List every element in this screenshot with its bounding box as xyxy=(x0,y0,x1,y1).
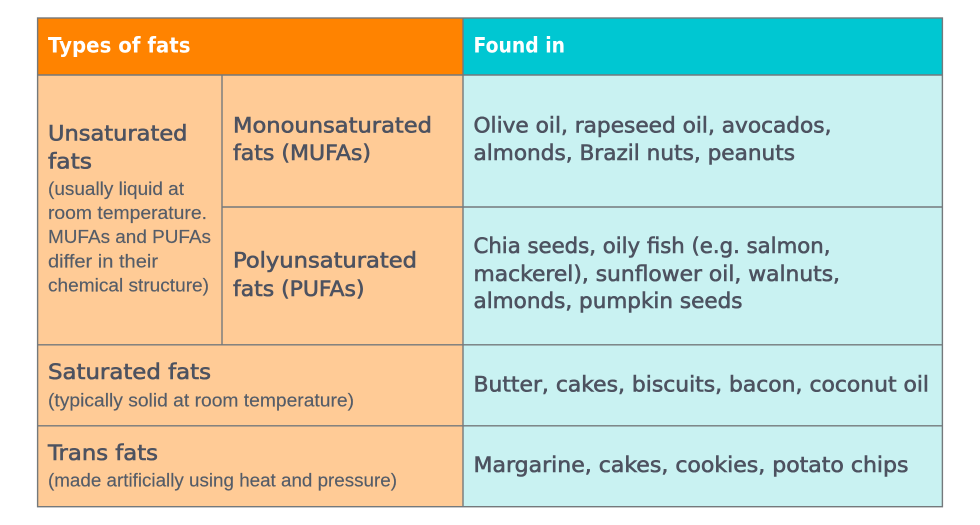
cell: polyunsaturated fats xyxy=(222,207,463,345)
cell: polyunsaturated sources: Chia seeds, oily fish (e.g. salmon, xyxy=(474,234,830,258)
header: found in xyxy=(463,18,942,75)
cell: trans fats: Trans fats xyxy=(47,441,158,465)
cell: unsaturated fats: room temperature. xyxy=(48,202,207,223)
cell: unsaturated fats: (usually liquid at xyxy=(48,178,184,199)
cell: saturated fats: Saturated fats xyxy=(48,360,211,384)
cell: monounsaturated sources: Olive oil, rapeseed oil, avocados, xyxy=(474,114,832,138)
cell: monounsaturated fats: fats (MUFAs) xyxy=(233,141,371,165)
cell: saturated sources xyxy=(463,345,942,426)
cell: trans sources xyxy=(463,426,942,507)
cell: monounsaturated sources: almonds, Brazil nuts, peanuts xyxy=(474,141,795,165)
cell: polyunsaturated fats: fats (PUFAs) xyxy=(233,277,364,301)
cell: polyunsaturated sources: mackerel), sunflower oil, walnuts, xyxy=(474,262,840,286)
cell: unsaturated fats: MUFAs and PUFAs xyxy=(48,226,211,247)
header: types of fats: Types of fats xyxy=(48,34,190,59)
cell: polyunsaturated fats: Polyunsaturated xyxy=(233,248,417,272)
cell: unsaturated fats xyxy=(38,75,222,345)
cell: trans fats: (made artificially using heat and pressure) xyxy=(48,470,397,491)
cell: saturated fats xyxy=(38,345,463,426)
cell: polyunsaturated sources xyxy=(463,207,942,345)
cell: trans fats xyxy=(38,426,463,507)
cell: trans sources: Margarine, cakes, cookies, potato chips xyxy=(474,453,908,477)
cell: unsaturated fats: chemical structure) xyxy=(48,274,209,296)
cell: monounsaturated fats: Monounsaturated xyxy=(233,114,432,138)
cell: unsaturated fats: Unsaturated xyxy=(48,122,188,146)
cell: monounsaturated fats xyxy=(222,75,463,207)
cell: unsaturated fats: fats xyxy=(48,150,92,174)
cell: saturated sources: Butter, cakes, biscuits, bacon, coconut oil xyxy=(474,373,929,397)
cell: polyunsaturated sources: almonds, pumpkin seeds xyxy=(474,289,742,313)
cell: unsaturated fats: differ in their xyxy=(48,250,158,272)
cell: monounsaturated sources xyxy=(463,75,942,207)
cell: saturated fats: (typically solid at room temperature) xyxy=(48,390,354,410)
header: found in: Found in xyxy=(474,34,565,59)
header: types of fats xyxy=(38,18,463,75)
